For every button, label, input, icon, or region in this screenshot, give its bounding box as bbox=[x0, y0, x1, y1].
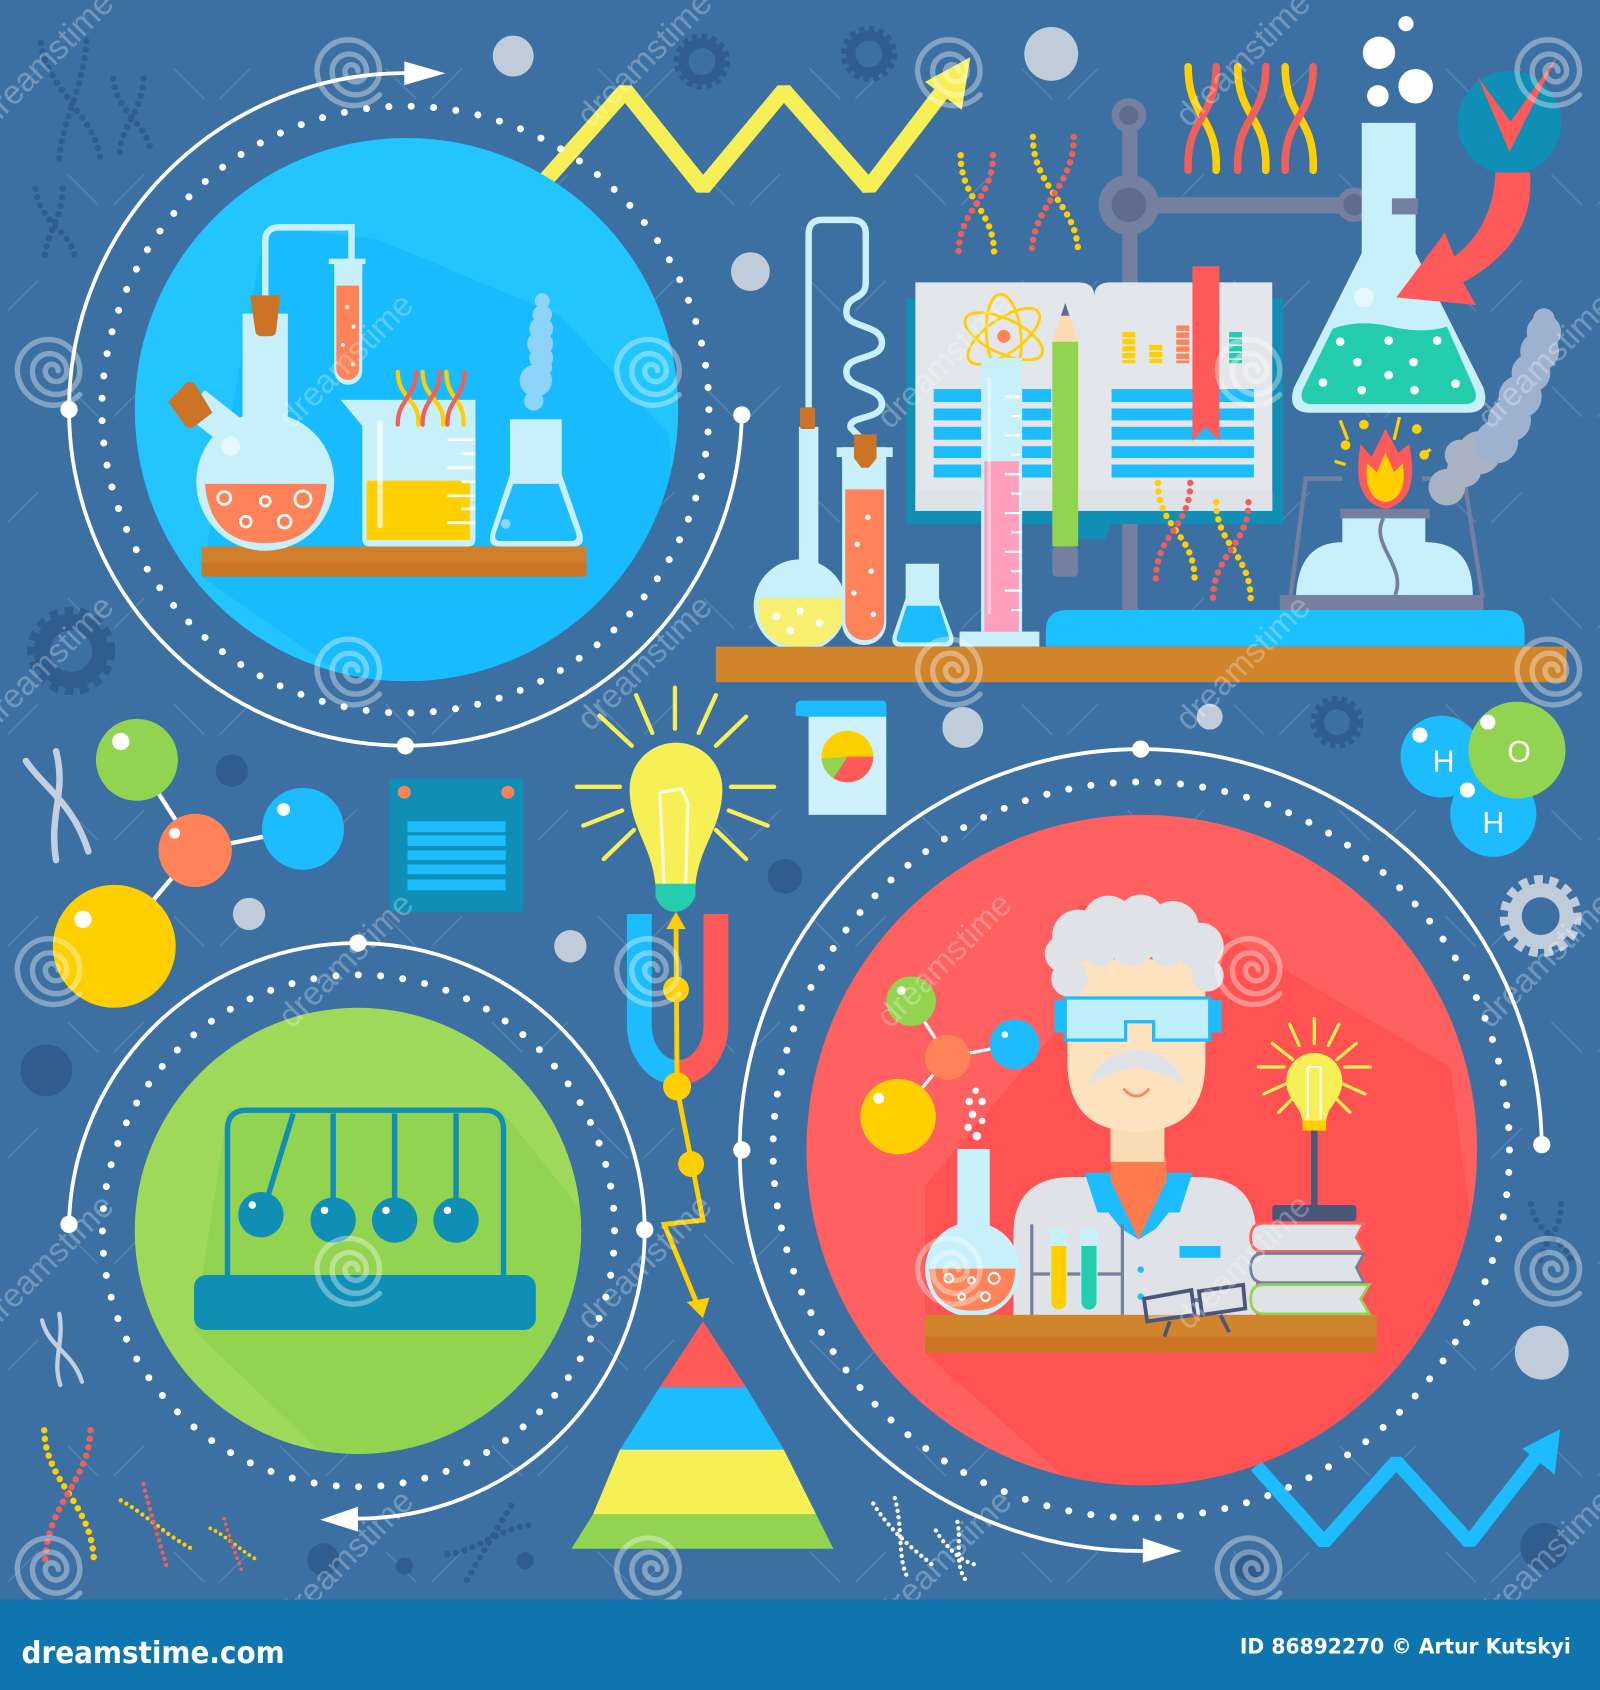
dna: top chromosomes bbox=[1188, 67, 1313, 170]
shelf bbox=[202, 546, 587, 577]
burner base bbox=[1046, 610, 1525, 647]
test tube rack bbox=[1032, 1224, 1122, 1315]
hair bbox=[1045, 895, 1224, 997]
newton's cradle bbox=[194, 1110, 536, 1330]
watermark text: dreamstime bbox=[870, 886, 1019, 1035]
dna: colored chromosomes bottom left bbox=[44, 1430, 257, 1574]
stack of books bbox=[1251, 1223, 1369, 1314]
lamp bbox=[1258, 1019, 1370, 1221]
clock with check mark bbox=[1458, 55, 1561, 175]
icon: water molecule bbox=[1401, 702, 1565, 857]
dotted ring bbox=[102, 106, 709, 713]
footer logo text: dreamstime.com bbox=[22, 1636, 285, 1671]
icon: gears bbox=[31, 29, 1577, 953]
ring arrow bbox=[60, 61, 750, 754]
coat bbox=[1013, 1158, 1256, 1315]
red circle bbox=[806, 815, 1477, 1485]
lightning path with nodes bbox=[663, 912, 709, 1318]
watermark text: dreamstime bbox=[870, 286, 1019, 436]
erlenmeyer flask bbox=[490, 419, 583, 546]
panel: glassware circle bbox=[60, 61, 750, 754]
graduated cylinder bbox=[960, 358, 1039, 647]
neck and face bbox=[1067, 959, 1205, 1162]
desk bbox=[925, 1315, 1377, 1353]
panel: scientist circle bbox=[733, 740, 1550, 1563]
icon: water molecule: O bbox=[1507, 736, 1531, 769]
watermark text: dreamstime bbox=[271, 286, 421, 436]
goggles bbox=[1054, 998, 1222, 1040]
small flask bbox=[892, 564, 953, 647]
ring arrow bbox=[60, 934, 653, 1532]
dotted ring bbox=[102, 975, 615, 1487]
watermark text: dreamstime bbox=[1168, 1187, 1318, 1337]
watermark text: dreamstime bbox=[870, 1483, 1019, 1632]
watermark text: dreamstime bbox=[271, 1483, 421, 1632]
dna: under book bbox=[1156, 483, 1251, 599]
eyeglasses bbox=[1144, 1285, 1245, 1336]
flask with curly tube bbox=[754, 220, 882, 652]
smile bbox=[1123, 1089, 1149, 1096]
flask and bubbles bbox=[925, 1088, 1020, 1317]
note panel bbox=[389, 778, 523, 912]
zigzag arrow: yellow bbox=[546, 57, 970, 188]
smoke bbox=[520, 293, 553, 411]
big flask bbox=[1292, 123, 1485, 413]
panel: apparatus shelf bbox=[716, 16, 1567, 682]
dna: light chromosomes bbox=[26, 751, 88, 1385]
dna strands bbox=[398, 372, 465, 425]
molecule bbox=[53, 719, 344, 1008]
tall test tube bbox=[837, 434, 893, 645]
panel: newton's cradle circle bbox=[60, 934, 653, 1532]
test tube bbox=[329, 259, 365, 385]
watermark text: dreamstime bbox=[271, 886, 421, 1035]
chart card bbox=[796, 701, 886, 815]
zigzag arrow: blue bbox=[1256, 1429, 1560, 1542]
flame bbox=[1335, 417, 1431, 509]
open book bbox=[907, 282, 1283, 539]
beaker bbox=[341, 400, 475, 546]
retort stand bbox=[1099, 98, 1371, 613]
green circle bbox=[135, 1008, 581, 1454]
blue circle bbox=[135, 138, 678, 681]
atom bbox=[958, 293, 1049, 380]
ring arrow bbox=[733, 740, 1550, 1563]
bookmark bbox=[1192, 266, 1219, 441]
magnet bbox=[639, 914, 716, 1072]
footer bar bbox=[0, 1599, 1600, 1690]
dotted ring bbox=[773, 782, 1509, 1518]
desk molecule bbox=[860, 976, 1039, 1154]
icon: water molecule: H bbox=[1482, 807, 1504, 840]
dna: dotted chromosomes bbox=[958, 137, 1078, 254]
dna: white chromosomes bbox=[873, 1498, 977, 1579]
round bottom flask bbox=[168, 227, 351, 551]
mustache bbox=[1089, 1050, 1186, 1084]
watermark text: dreamstime bbox=[570, 1187, 720, 1337]
watermark text: dreamstime bbox=[570, 588, 720, 738]
light bulb bbox=[577, 688, 774, 912]
gray smoke bbox=[1429, 308, 1561, 505]
image id and credit: ID 86892270 © Artur Kutskyi bbox=[1240, 1634, 1571, 1659]
red arrow bbox=[1396, 172, 1530, 305]
pyramid bbox=[571, 1321, 833, 1549]
bubbles bbox=[1363, 16, 1433, 107]
pencil bbox=[1052, 303, 1078, 577]
long shelf bbox=[716, 647, 1567, 682]
watermark text: dreamstime bbox=[1168, 588, 1318, 738]
icon: water molecule: H bbox=[1433, 746, 1455, 779]
burner bbox=[1280, 479, 1484, 610]
